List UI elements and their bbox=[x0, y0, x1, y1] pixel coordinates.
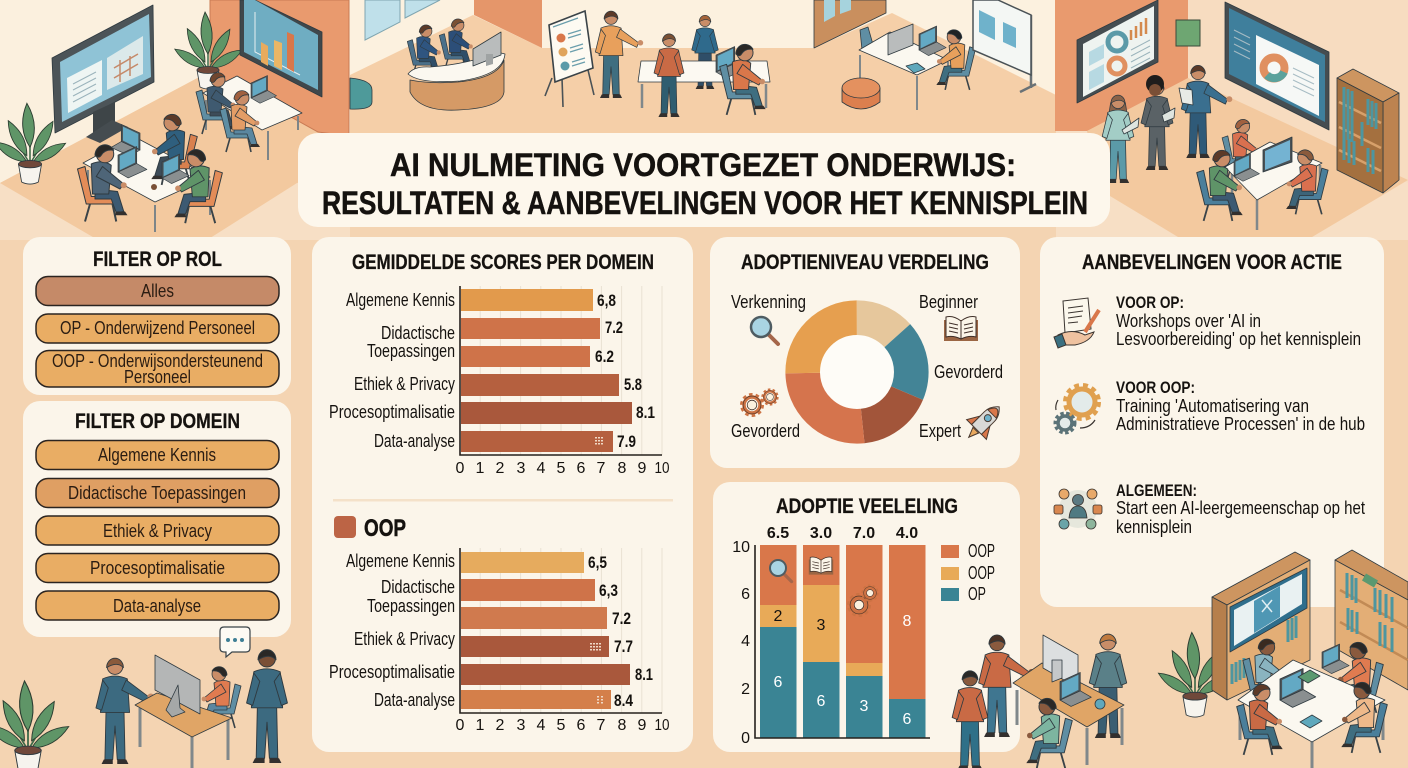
bar chart: oop scores: Toepassingen bbox=[367, 596, 455, 616]
panel: adoptieniveau verdeling bbox=[710, 237, 1020, 468]
legend: stacked chart: OOP bbox=[968, 563, 995, 583]
bar chart: oop scores: 7.2 bbox=[612, 609, 631, 628]
bar chart: oop scores: Procesoptimalisatie bbox=[329, 662, 455, 682]
heading: filter op domein: FILTER OP DOMEIN bbox=[75, 410, 240, 433]
bookshelf with screen bbox=[1212, 552, 1310, 700]
labels: donut: Expert bbox=[919, 421, 961, 441]
labels: donut: Beginner bbox=[919, 292, 978, 312]
bookshelf bbox=[1337, 69, 1399, 193]
presenter bbox=[595, 11, 643, 98]
bar chart: oop scores: Ethiek & Privacy bbox=[354, 629, 455, 649]
bar chart: oop scores: 5 bbox=[557, 717, 566, 734]
heading: filter op rol: FILTER OP ROL bbox=[93, 248, 222, 271]
bar chart: oop scores: 2 bbox=[496, 717, 505, 734]
button: ethiek en privacy bbox=[36, 516, 279, 545]
bar chart: op scores: 6,8 bbox=[597, 291, 616, 310]
bar chart: oop scores: 0 bbox=[456, 717, 465, 734]
bar chart: oop scores: Algemene Kennis bbox=[346, 551, 455, 571]
stacked bar chart: 3.0 bbox=[810, 525, 832, 542]
stacked bar chart bbox=[732, 525, 930, 747]
small green board bbox=[1176, 20, 1200, 46]
bar chart: op scores: 6.2 bbox=[595, 347, 614, 366]
button: alles bbox=[36, 276, 279, 306]
teal pouf bbox=[350, 78, 372, 109]
recommendation: voor op: Workshops over 'AI in bbox=[1116, 311, 1261, 331]
orange pouf bbox=[842, 78, 880, 109]
stacked bar chart: 6 bbox=[817, 693, 826, 710]
standing group bbox=[1102, 65, 1232, 183]
donut chart bbox=[803, 318, 911, 426]
button: algemene kennis bbox=[36, 440, 279, 470]
legend: oop: OOP bbox=[364, 515, 406, 542]
desk with monitor and person bbox=[859, 24, 976, 110]
bar chart: oop scores: 6 bbox=[577, 717, 586, 734]
recommendation: voor oop bbox=[1116, 378, 1365, 434]
bulletin board bbox=[814, 0, 886, 48]
labels: donut: Gevorderd bbox=[731, 421, 800, 441]
table with two people bbox=[638, 15, 770, 117]
icon: gears and arrows bbox=[1055, 385, 1099, 433]
bar chart: oop scores: 4 bbox=[537, 717, 546, 734]
panel: filter op domein bbox=[23, 401, 291, 637]
recommendation: voor oop: Administratieve Processen' in de hub bbox=[1116, 414, 1365, 434]
bar chart: oop scores: 6,5 bbox=[588, 553, 607, 572]
large wall screen with donut bbox=[1225, 2, 1329, 130]
icon: plant bbox=[0, 680, 72, 768]
stacked bar chart: 4.0 bbox=[896, 525, 918, 542]
stacked bar chart: 8 bbox=[903, 613, 912, 630]
stacked bar chart: 0 bbox=[741, 730, 750, 747]
stacked bar chart: 4 bbox=[741, 633, 750, 650]
bar chart: op scores: 4 bbox=[537, 460, 546, 477]
bar chart: op scores: 3 bbox=[517, 460, 526, 477]
button: didactische toepassingen bbox=[36, 478, 279, 508]
title: AI NULMETING VOORTGEZET ONDERWIJS: bbox=[390, 147, 1016, 183]
bar chart: op scores bbox=[329, 286, 670, 477]
windows bbox=[365, 0, 440, 40]
bar chart: oop scores: 10 bbox=[654, 717, 670, 734]
bar chart: op scores: 6 bbox=[577, 460, 586, 477]
recommendation: algemeen bbox=[1116, 481, 1365, 537]
icon: plant left bbox=[0, 103, 68, 184]
bar chart: op scores: Didactische bbox=[381, 323, 455, 343]
legend: stacked chart: OP bbox=[968, 584, 986, 604]
icon: plant on wall corner bbox=[172, 12, 244, 89]
labels: donut bbox=[731, 292, 1003, 441]
icon: gears bbox=[742, 389, 778, 416]
bar chart: oop scores: 8 bbox=[618, 717, 627, 734]
stacked bar chart: 2 bbox=[774, 608, 783, 625]
table with four people bbox=[1237, 639, 1387, 768]
icon: book bbox=[944, 316, 978, 341]
recommendation: voor op: Lesvoorbereiding' op het kennisplein bbox=[1116, 329, 1361, 349]
bar chart: op scores: Ethiek & Privacy bbox=[354, 374, 455, 394]
panel: filter op rol bbox=[23, 237, 291, 395]
bar chart: op scores: 2 bbox=[496, 460, 505, 477]
heading: adoptie verdeling: ADOPTIE VEELELING bbox=[776, 495, 958, 518]
button: alles: Alles bbox=[141, 281, 174, 301]
scene: top right office bbox=[1055, 0, 1408, 240]
stacked bar chart: 6 bbox=[741, 586, 750, 603]
bar chart: oop scores: Data-analyse bbox=[374, 690, 455, 710]
bar chart: oop scores: 7.7 bbox=[614, 637, 633, 656]
stacked bar chart: 7.0 bbox=[853, 525, 875, 542]
bar chart: oop scores: 9 bbox=[638, 717, 647, 734]
whiteboard bbox=[973, 0, 1036, 92]
panel: gemiddelde scores bbox=[312, 237, 693, 752]
bar chart: op scores: 8.1 bbox=[636, 403, 655, 422]
standing woman bbox=[979, 635, 1035, 737]
woman standing bbox=[96, 658, 154, 764]
bar chart: oop scores bbox=[329, 548, 670, 734]
bar chart: oop scores: Didactische bbox=[381, 577, 455, 597]
recommendation: algemeen: Start een AI-leergemeenschap op het bbox=[1116, 498, 1365, 518]
button: procesoptimalisatie bbox=[36, 554, 279, 582]
bar chart: op scores: Procesoptimalisatie bbox=[329, 402, 455, 422]
heading: adoptieniveau verdeling: ADOPTIENIVEAU VERDELING bbox=[741, 251, 989, 274]
bar chart: op scores: Data-analyse bbox=[374, 431, 455, 451]
labels: donut: Gevorderd bbox=[934, 362, 1003, 382]
table with three people bbox=[1197, 119, 1328, 230]
bar chart: op scores: Toepassingen bbox=[367, 341, 455, 361]
button: algemene kennis: Algemene Kennis bbox=[98, 445, 216, 465]
icon: large monitor bbox=[52, 5, 154, 143]
stacked bar chart: 6 bbox=[903, 711, 912, 728]
stacked bar chart: 10 bbox=[732, 539, 750, 556]
bar chart: oop scores: 6,3 bbox=[599, 581, 618, 600]
bar chart: op scores: 7.2 bbox=[605, 318, 623, 337]
legend: stacked chart: OOP bbox=[968, 541, 995, 561]
bar chart: op scores: 5.8 bbox=[624, 375, 642, 394]
scene: top left office bbox=[0, 0, 350, 240]
button: ethiek en privacy: Ethiek & Privacy bbox=[103, 521, 212, 541]
bar chart: op scores: 9 bbox=[638, 460, 647, 477]
button: data-analyse: Data-analyse bbox=[113, 596, 201, 616]
recommendation: voor oop: VOOR OOP: bbox=[1116, 378, 1195, 397]
second bookshelf bbox=[1335, 550, 1408, 690]
button: op bbox=[36, 314, 279, 343]
bar chart: op scores: 0 bbox=[456, 460, 465, 477]
recommendation: algemeen: kennisplein bbox=[1116, 517, 1192, 537]
button: op: OP - Onderwijzend Personeel bbox=[60, 318, 255, 338]
button: didactische toepassingen: Didactische Toepassingen bbox=[68, 483, 246, 503]
icon: plant bbox=[1156, 632, 1235, 717]
bar chart: op scores: 7.9 bbox=[617, 432, 636, 451]
icon: learning community bbox=[1054, 489, 1102, 529]
icon: magnifier bbox=[751, 317, 778, 344]
title bbox=[298, 133, 1110, 227]
heading: aanbevelingen: AANBEVELINGEN VOOR ACTIE bbox=[1082, 251, 1342, 274]
icon: hand with document bbox=[1054, 298, 1099, 348]
bar chart: oop scores: 1 bbox=[476, 717, 485, 734]
desk with monitor, laptop and two people bbox=[1013, 634, 1127, 768]
bar chart: oop scores: 8.1 bbox=[635, 665, 653, 684]
boy standing bbox=[952, 671, 988, 768]
bar chart: op scores: 10 bbox=[654, 460, 670, 477]
button: oop bbox=[36, 350, 279, 387]
bar chart: oop scores: 8.4 bbox=[614, 691, 633, 710]
recommendation: algemeen: ALGEMEEN: bbox=[1116, 481, 1197, 500]
desk with computer and child bbox=[135, 655, 241, 768]
labels: donut: Verkenning bbox=[731, 292, 806, 312]
panel: aanbevelingen voor actie bbox=[1040, 237, 1384, 607]
legend: oop bbox=[334, 515, 406, 542]
table 2 with two people bbox=[196, 73, 302, 160]
scene: bottom right office bbox=[952, 550, 1408, 768]
heading: gemiddelde scores per domein: GEMIDDELDE SCORES PER DOMEIN bbox=[352, 251, 654, 274]
bar chart: oop scores: 3 bbox=[517, 717, 526, 734]
speech bubble bbox=[220, 627, 250, 657]
title: RESULTATEN & AANBEVELINGEN VOOR HET KENNISPLEIN bbox=[322, 185, 1088, 221]
legend: stacked chart bbox=[941, 541, 995, 604]
bar chart: oop scores: 7 bbox=[597, 717, 606, 734]
stacked bar chart: 3 bbox=[817, 617, 826, 634]
recommendation: voor oop: Training 'Automatisering van bbox=[1116, 396, 1309, 416]
reception desk with two people bbox=[407, 19, 505, 110]
stacked bar chart: 6 bbox=[774, 674, 783, 691]
bar chart: op scores: 5 bbox=[557, 460, 566, 477]
flip chart bbox=[545, 11, 594, 107]
wall screen with charts bbox=[1077, 0, 1158, 103]
stacked bar chart: 3 bbox=[860, 698, 869, 715]
bar chart: op scores: Algemene Kennis bbox=[346, 290, 455, 310]
button: procesoptimalisatie: Procesoptimalisatie bbox=[90, 558, 225, 578]
stacked bar chart: 6.5 bbox=[767, 525, 789, 542]
bar chart: op scores: 1 bbox=[476, 460, 485, 477]
button: oop: OOP - Onderwijsondersteunend bbox=[52, 351, 263, 371]
table 1 with three people bbox=[78, 114, 222, 232]
panel: adoptie verdeling stacked chart bbox=[713, 482, 1020, 752]
scene: bottom left office bbox=[0, 627, 287, 768]
man standing bbox=[247, 650, 287, 763]
recommendation: voor op: VOOR OP: bbox=[1116, 293, 1184, 312]
recommendation: voor op bbox=[1116, 293, 1361, 349]
bar chart: op scores: 7 bbox=[597, 460, 606, 477]
scene: top middle office bbox=[350, 0, 1056, 133]
button: data-analyse bbox=[36, 591, 279, 620]
wall chart screen bbox=[240, 0, 322, 97]
bar chart: op scores: 8 bbox=[618, 460, 627, 477]
stacked bar chart: 2 bbox=[741, 681, 750, 698]
icon: rocket bbox=[959, 397, 1009, 447]
button: oop: Personeel bbox=[124, 367, 191, 387]
